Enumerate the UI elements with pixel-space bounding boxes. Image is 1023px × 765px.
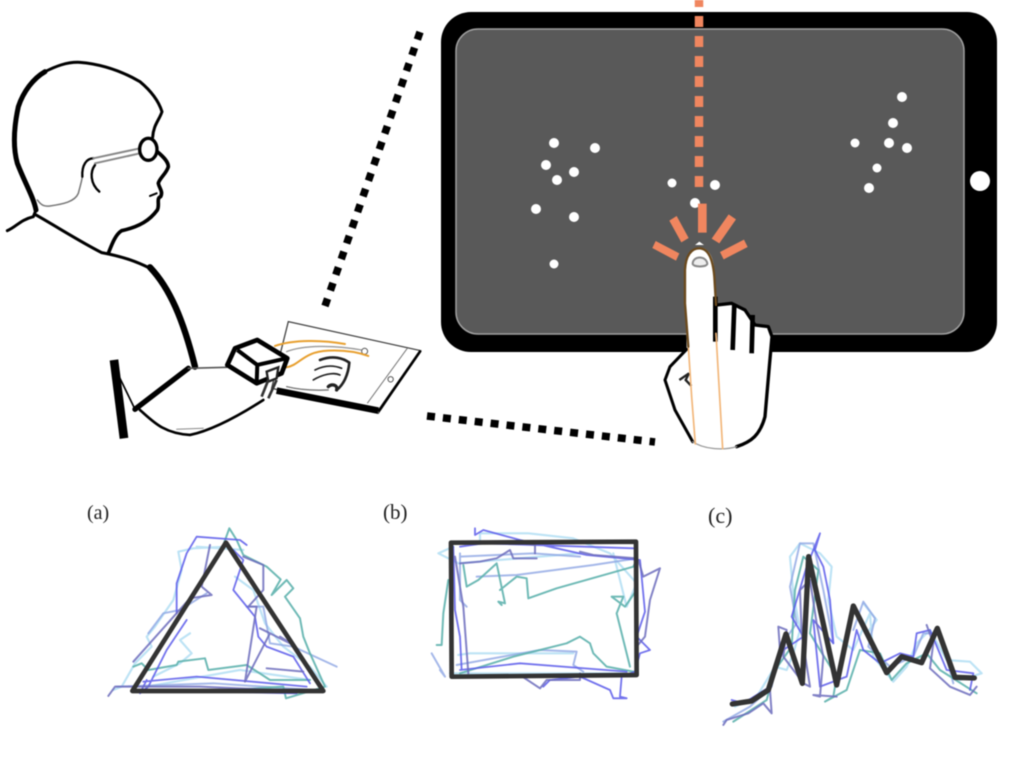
hand outline left [665, 349, 693, 442]
glasses [93, 148, 140, 163]
large tablet [441, 12, 997, 352]
orange traces [275, 341, 368, 367]
hand shape [665, 247, 772, 449]
neck and shoulder [7, 210, 150, 268]
face [108, 152, 168, 253]
wrist sensor cube [227, 340, 287, 398]
person outline [7, 62, 263, 438]
head top [45, 62, 162, 137]
chart (c): line traces [723, 533, 982, 725]
mouth [150, 193, 157, 196]
black dashed zoom line lower [427, 416, 655, 442]
fingers lines [715, 297, 753, 353]
hairline [37, 177, 82, 206]
sleeve [140, 400, 263, 435]
upper arm [135, 368, 188, 409]
hand outline right [717, 303, 772, 447]
head [14, 72, 45, 210]
thumb fold [679, 373, 691, 386]
orange dashed line [695, 0, 703, 195]
label (a): (a) [87, 502, 109, 524]
chart (a): triangle traces [108, 528, 337, 698]
index finger outline [685, 248, 716, 347]
fingertip nail [693, 257, 707, 266]
label (c): (c) [708, 503, 732, 528]
orange outlines [688, 333, 723, 449]
chair [114, 360, 124, 438]
small tablet [272, 322, 421, 413]
black dashed zoom line upper [325, 32, 420, 306]
ear [82, 158, 99, 192]
burst rays [652, 204, 748, 261]
small hand [287, 346, 362, 390]
touch dots [531, 92, 912, 268]
label (b): (b) [383, 500, 408, 524]
hand touching the tablet [652, 204, 772, 449]
hand outline bottom [693, 442, 737, 449]
chart (b): rectangle traces [432, 528, 660, 698]
back of arm [150, 267, 195, 367]
